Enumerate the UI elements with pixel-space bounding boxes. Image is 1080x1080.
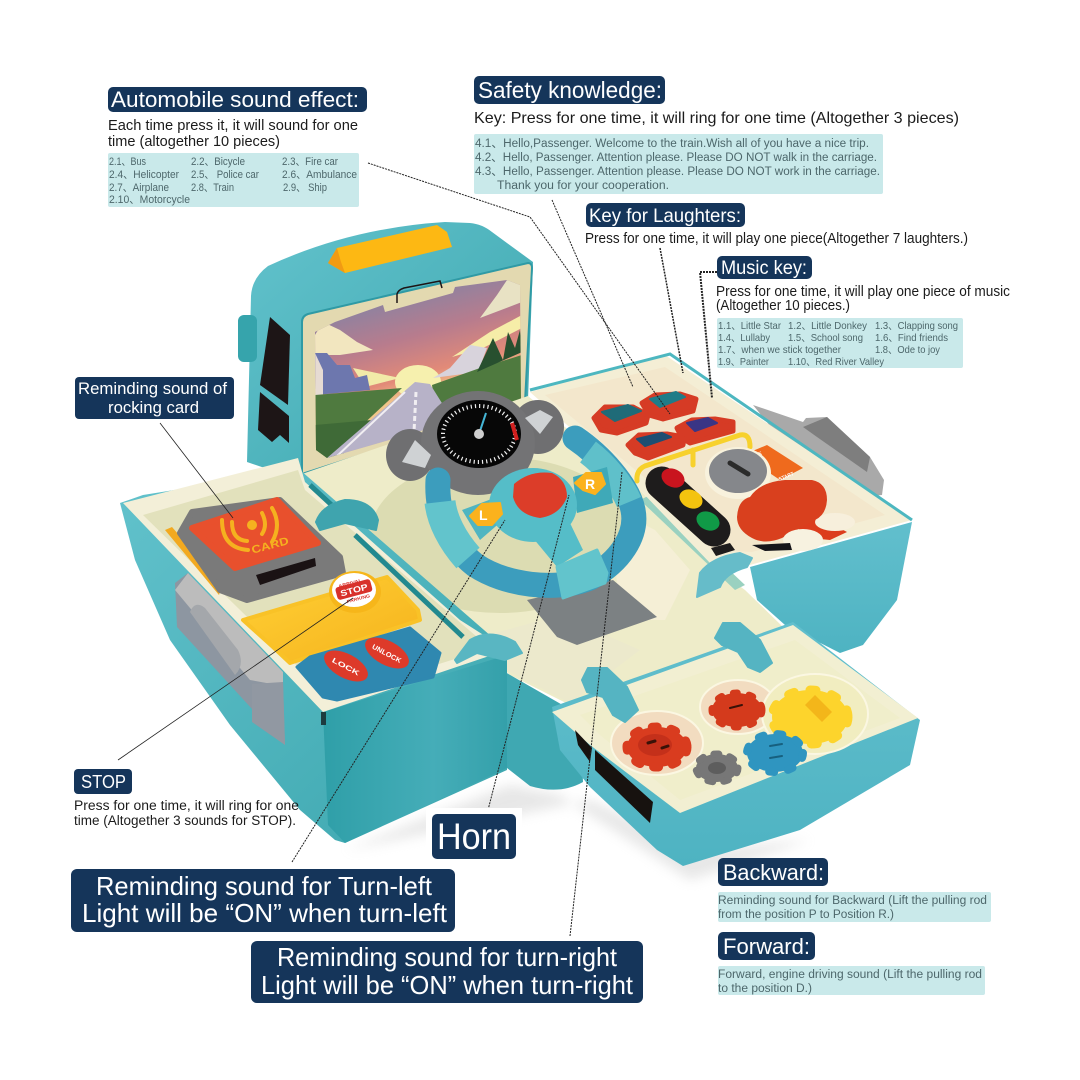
panel: backward [718, 858, 991, 922]
list: songs: 1.8、Ode to joy [875, 344, 941, 356]
list: vehicle sounds: 2.2、Bicycle [191, 156, 245, 168]
icon: rocking card reader [180, 500, 343, 600]
panel: stop [74, 769, 299, 828]
list: safety announcements: 4.1、Hello,Passenger. Welcome to the train.Wish all of you have a nice trip. [475, 138, 869, 150]
text: stop description: Press for one time, it will ring for one [74, 798, 299, 813]
gear wells [611, 711, 703, 775]
list: songs: 1.5、School song [788, 332, 863, 344]
callout: reminding sound of rocking card: Reminding sound of [78, 380, 227, 398]
leader lines [118, 163, 717, 936]
side windows [260, 317, 290, 405]
road scene [315, 280, 521, 458]
heading: safety knowledge: Safety knowledge: [478, 77, 662, 103]
text: backward description [718, 892, 991, 922]
black side slot [595, 750, 653, 823]
icon: four red sound buttons [594, 392, 733, 458]
heading: stop [74, 769, 132, 794]
heading: key for laughters: Key for Laughters: [589, 205, 741, 227]
list: vehicle sounds: 2.4、Helicopter [109, 169, 179, 181]
text: automobile description: Each time press it, it will sound for one [108, 118, 358, 134]
list: songs: 1.2、Little Donkey [788, 320, 868, 332]
heading: music key: Music key: [721, 257, 807, 279]
panel: key for laughters [585, 203, 968, 247]
callout: turn-right: Light will be “ON” when turn-right [261, 970, 634, 1000]
icon: turn-right button [575, 473, 605, 494]
icon: grey carry handle [175, 573, 285, 745]
list: vehicle sounds: 2.9、 Ship [283, 182, 327, 194]
text: music description: Press for one time, it will play one piece of music [716, 284, 1010, 300]
centre floor [302, 396, 782, 705]
list: vehicle sounds: 2.3、Fire car [282, 156, 338, 168]
heading: forward: Forward: [723, 934, 810, 959]
icon: gears [627, 690, 848, 782]
text: automobile description: time (altogether 10 pieces) [108, 134, 280, 150]
text: safety description: Key: Press for one time, it will ring for one time (Altogether 3 pieces) [474, 110, 959, 127]
text: music description: (Altogether 10 pieces.) [716, 298, 850, 314]
icon: ignition lock: LOCK [748, 450, 763, 461]
left tray [120, 458, 507, 843]
list: songs [717, 318, 963, 368]
gear tray [552, 622, 920, 866]
icon: turn-left button [470, 503, 502, 525]
text: stop description [74, 798, 299, 828]
grey handle on right tray [753, 405, 884, 500]
text: backward description: from the position P to Position R.) [718, 909, 894, 921]
heading: automobile sound effect: Automobile sound effect: [111, 87, 359, 112]
list: songs: 1.6、Find friends [875, 332, 948, 344]
text: forward description: Forward, engine driving sound (Lift the pulling rod [718, 969, 982, 981]
icon: rocking card reader: CARD [250, 535, 290, 557]
list: vehicle sounds [108, 153, 359, 207]
icon: ignition lock [705, 445, 803, 499]
list: songs: 1.7、when we stick together [718, 344, 841, 356]
list: vehicle sounds: 2.6、Ambulance [282, 169, 357, 181]
list: songs: 1.4、Lullaby [718, 332, 771, 344]
instrument cluster [386, 391, 564, 495]
list: vehicle sounds: 2.5、 Police car [191, 169, 259, 181]
icon: blue remote key: UNLOCK [371, 644, 402, 665]
callout: turn-right: Reminding sound for turn-right [277, 942, 618, 972]
hinge clips [316, 500, 522, 663]
icon: yellow STOP barrel: STOP [339, 581, 369, 598]
callout: turn-right [251, 941, 643, 1003]
list: vehicle sounds: 2.7、Airplane [109, 182, 169, 194]
icon: red horn hammer [737, 480, 855, 551]
heading: backward: Backward: [723, 860, 824, 885]
callout: turn-left [71, 869, 455, 932]
text: laughters description: Press for one time, it will play one piece(Altogether 7 laughters.) [585, 231, 968, 247]
hinge clips [582, 668, 638, 722]
callout: turn-left: Reminding sound for Turn-left [96, 871, 433, 901]
panel: music key [716, 256, 1010, 368]
icon: ignition lock: START [778, 471, 795, 483]
text: backward description: Reminding sound for Backward (Lift the pulling rod [718, 895, 987, 907]
toy: open activity car product illustration [120, 222, 920, 880]
callout: turn-left: Light will be “ON” when turn-left [82, 898, 448, 928]
icon: yellow strip [165, 527, 222, 595]
panel: automobile sound effect [108, 87, 367, 207]
panel: forward [718, 932, 985, 995]
callout: horn [426, 808, 522, 864]
icon: red horn button [513, 472, 567, 518]
list: songs: 1.3、Clapping song [875, 320, 958, 332]
list: safety announcements: Thank you for your cooperation. [497, 180, 669, 192]
list: vehicle sounds: 2.1、Bus [109, 156, 146, 168]
heading: stop: STOP [81, 772, 126, 792]
list: songs: 1.10、Red River Valley [788, 356, 885, 368]
screen frame [302, 263, 532, 474]
icon: yellow STOP barrel: ARRIVAL [338, 578, 363, 589]
icon: blue remote key: LOCK [330, 657, 360, 677]
icon: roof handle [328, 225, 452, 273]
icon: yellow STOP barrel [243, 571, 420, 663]
callout: reminding sound of rocking card [75, 377, 234, 419]
list: vehicle sounds: 2.10、Motorcycle [109, 194, 190, 206]
list: vehicle sounds: 2.8、Train [191, 182, 234, 194]
icon: yellow STOP barrel: PARKING [346, 593, 371, 604]
list: safety announcements: 4.2、Hello, Passenger. Attention please. Please DO NOT walk in the carriage. [475, 152, 877, 164]
icon: turn-right button: R [585, 476, 595, 492]
text: forward description: to the position D.) [718, 983, 812, 995]
callout: reminding sound of rocking card: rocking card [108, 399, 199, 417]
text: stop description: time (Altogether 3 sounds for STOP). [74, 813, 296, 828]
list: safety announcements: 4.3、Hello, Passenger. Attention please. Please DO NOT work in the carriage. [475, 166, 880, 178]
panel: safety knowledge [474, 76, 959, 194]
icon: blue remote key [297, 628, 440, 700]
right tray [530, 354, 912, 653]
callout: horn: Horn [437, 816, 511, 857]
icon: traffic light [658, 465, 735, 556]
list: songs: 1.1、Little Star [718, 320, 781, 332]
text: forward description [718, 966, 985, 995]
list: safety announcements [474, 134, 883, 194]
list: songs: 1.9、Painter [718, 356, 769, 368]
text: automobile description [108, 118, 358, 150]
side clip [238, 315, 257, 362]
icon: turn-left button: L [479, 507, 488, 523]
steering wheel [438, 438, 634, 598]
lower centre body [505, 672, 583, 790]
text: music description [716, 284, 1010, 314]
grey pedal [527, 580, 657, 645]
rear panel with screen [238, 222, 533, 480]
icon: yellow rail [637, 435, 750, 481]
